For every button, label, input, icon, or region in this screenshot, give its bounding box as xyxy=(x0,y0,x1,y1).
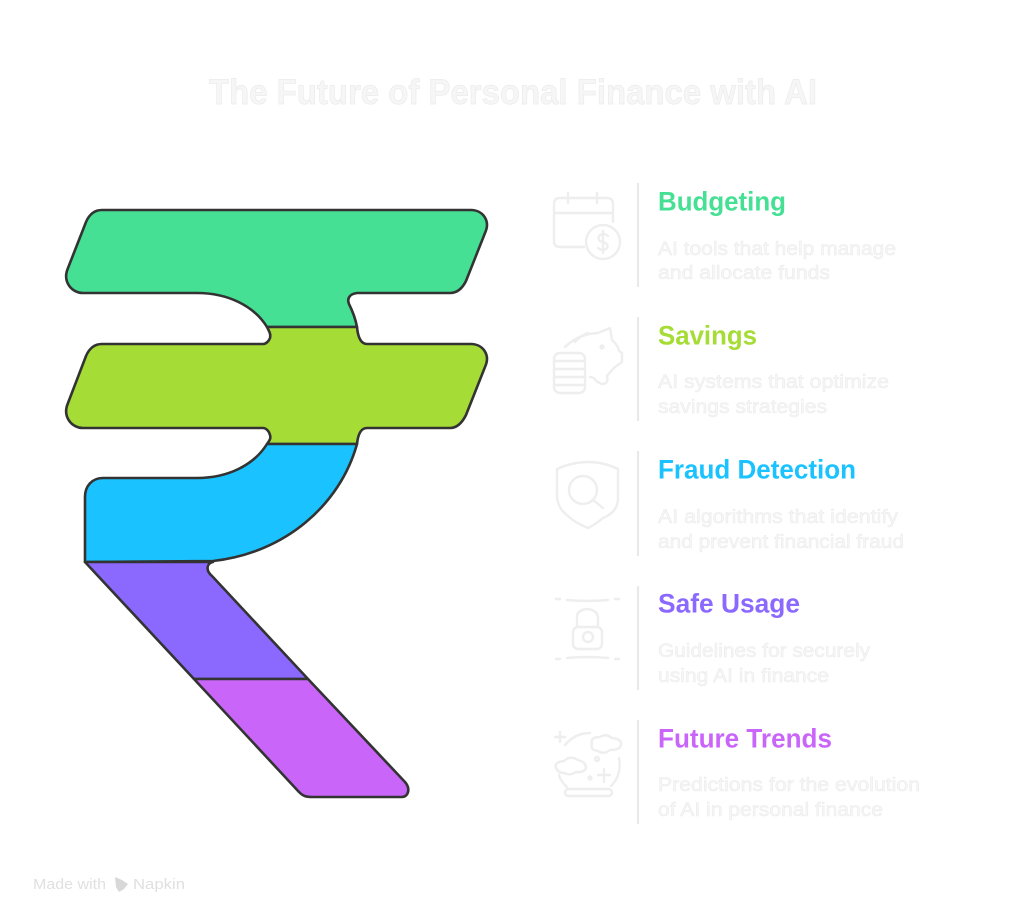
heading: Savings xyxy=(658,320,757,350)
segment: safe usage xyxy=(85,562,308,679)
divider xyxy=(637,587,639,689)
heading: Safe Usage xyxy=(658,588,800,618)
segment: future trends xyxy=(194,679,408,797)
description: of AI in personal finance xyxy=(658,799,883,821)
divider xyxy=(637,184,639,286)
title: The Future of Personal Finance with AI xyxy=(209,73,817,112)
segment: budgeting xyxy=(66,210,487,327)
description: and prevent financial fraud xyxy=(658,531,904,553)
footer: made with napkin: Made with xyxy=(33,876,106,893)
description: Guidelines for securely xyxy=(658,640,870,662)
rupee symbol chart xyxy=(66,210,487,797)
segment: savings xyxy=(66,327,487,444)
item: budgeting xyxy=(554,184,896,286)
heading: Future Trends xyxy=(658,724,832,754)
description: Predictions for the evolution xyxy=(658,774,920,796)
footer: made with napkin xyxy=(33,876,185,893)
description: AI tools that help manage xyxy=(658,238,896,260)
divider xyxy=(637,452,639,555)
icon: padlock xyxy=(556,599,619,659)
description: and allocate funds xyxy=(658,262,830,284)
segment: fraud detection xyxy=(85,444,357,562)
icon: piggy bank with coins xyxy=(554,328,622,393)
item: future trends xyxy=(555,721,920,823)
icon: crystal ball xyxy=(555,732,621,796)
icon: calendar with dollar xyxy=(554,193,620,259)
item: fraud detection xyxy=(557,452,904,555)
heading: Fraud Detection xyxy=(658,454,856,484)
heading: Budgeting xyxy=(658,186,786,216)
description: using AI in finance xyxy=(658,665,829,687)
description: AI algorithms that identify xyxy=(658,506,898,528)
divider xyxy=(637,721,639,823)
description: savings strategies xyxy=(658,396,827,418)
item: savings xyxy=(554,318,889,420)
footer: made with napkin: Napkin xyxy=(133,876,185,893)
description: AI systems that optimize xyxy=(658,371,889,393)
divider xyxy=(637,318,639,420)
icon: shield with magnifier xyxy=(557,462,618,528)
item: safe usage xyxy=(556,587,870,689)
